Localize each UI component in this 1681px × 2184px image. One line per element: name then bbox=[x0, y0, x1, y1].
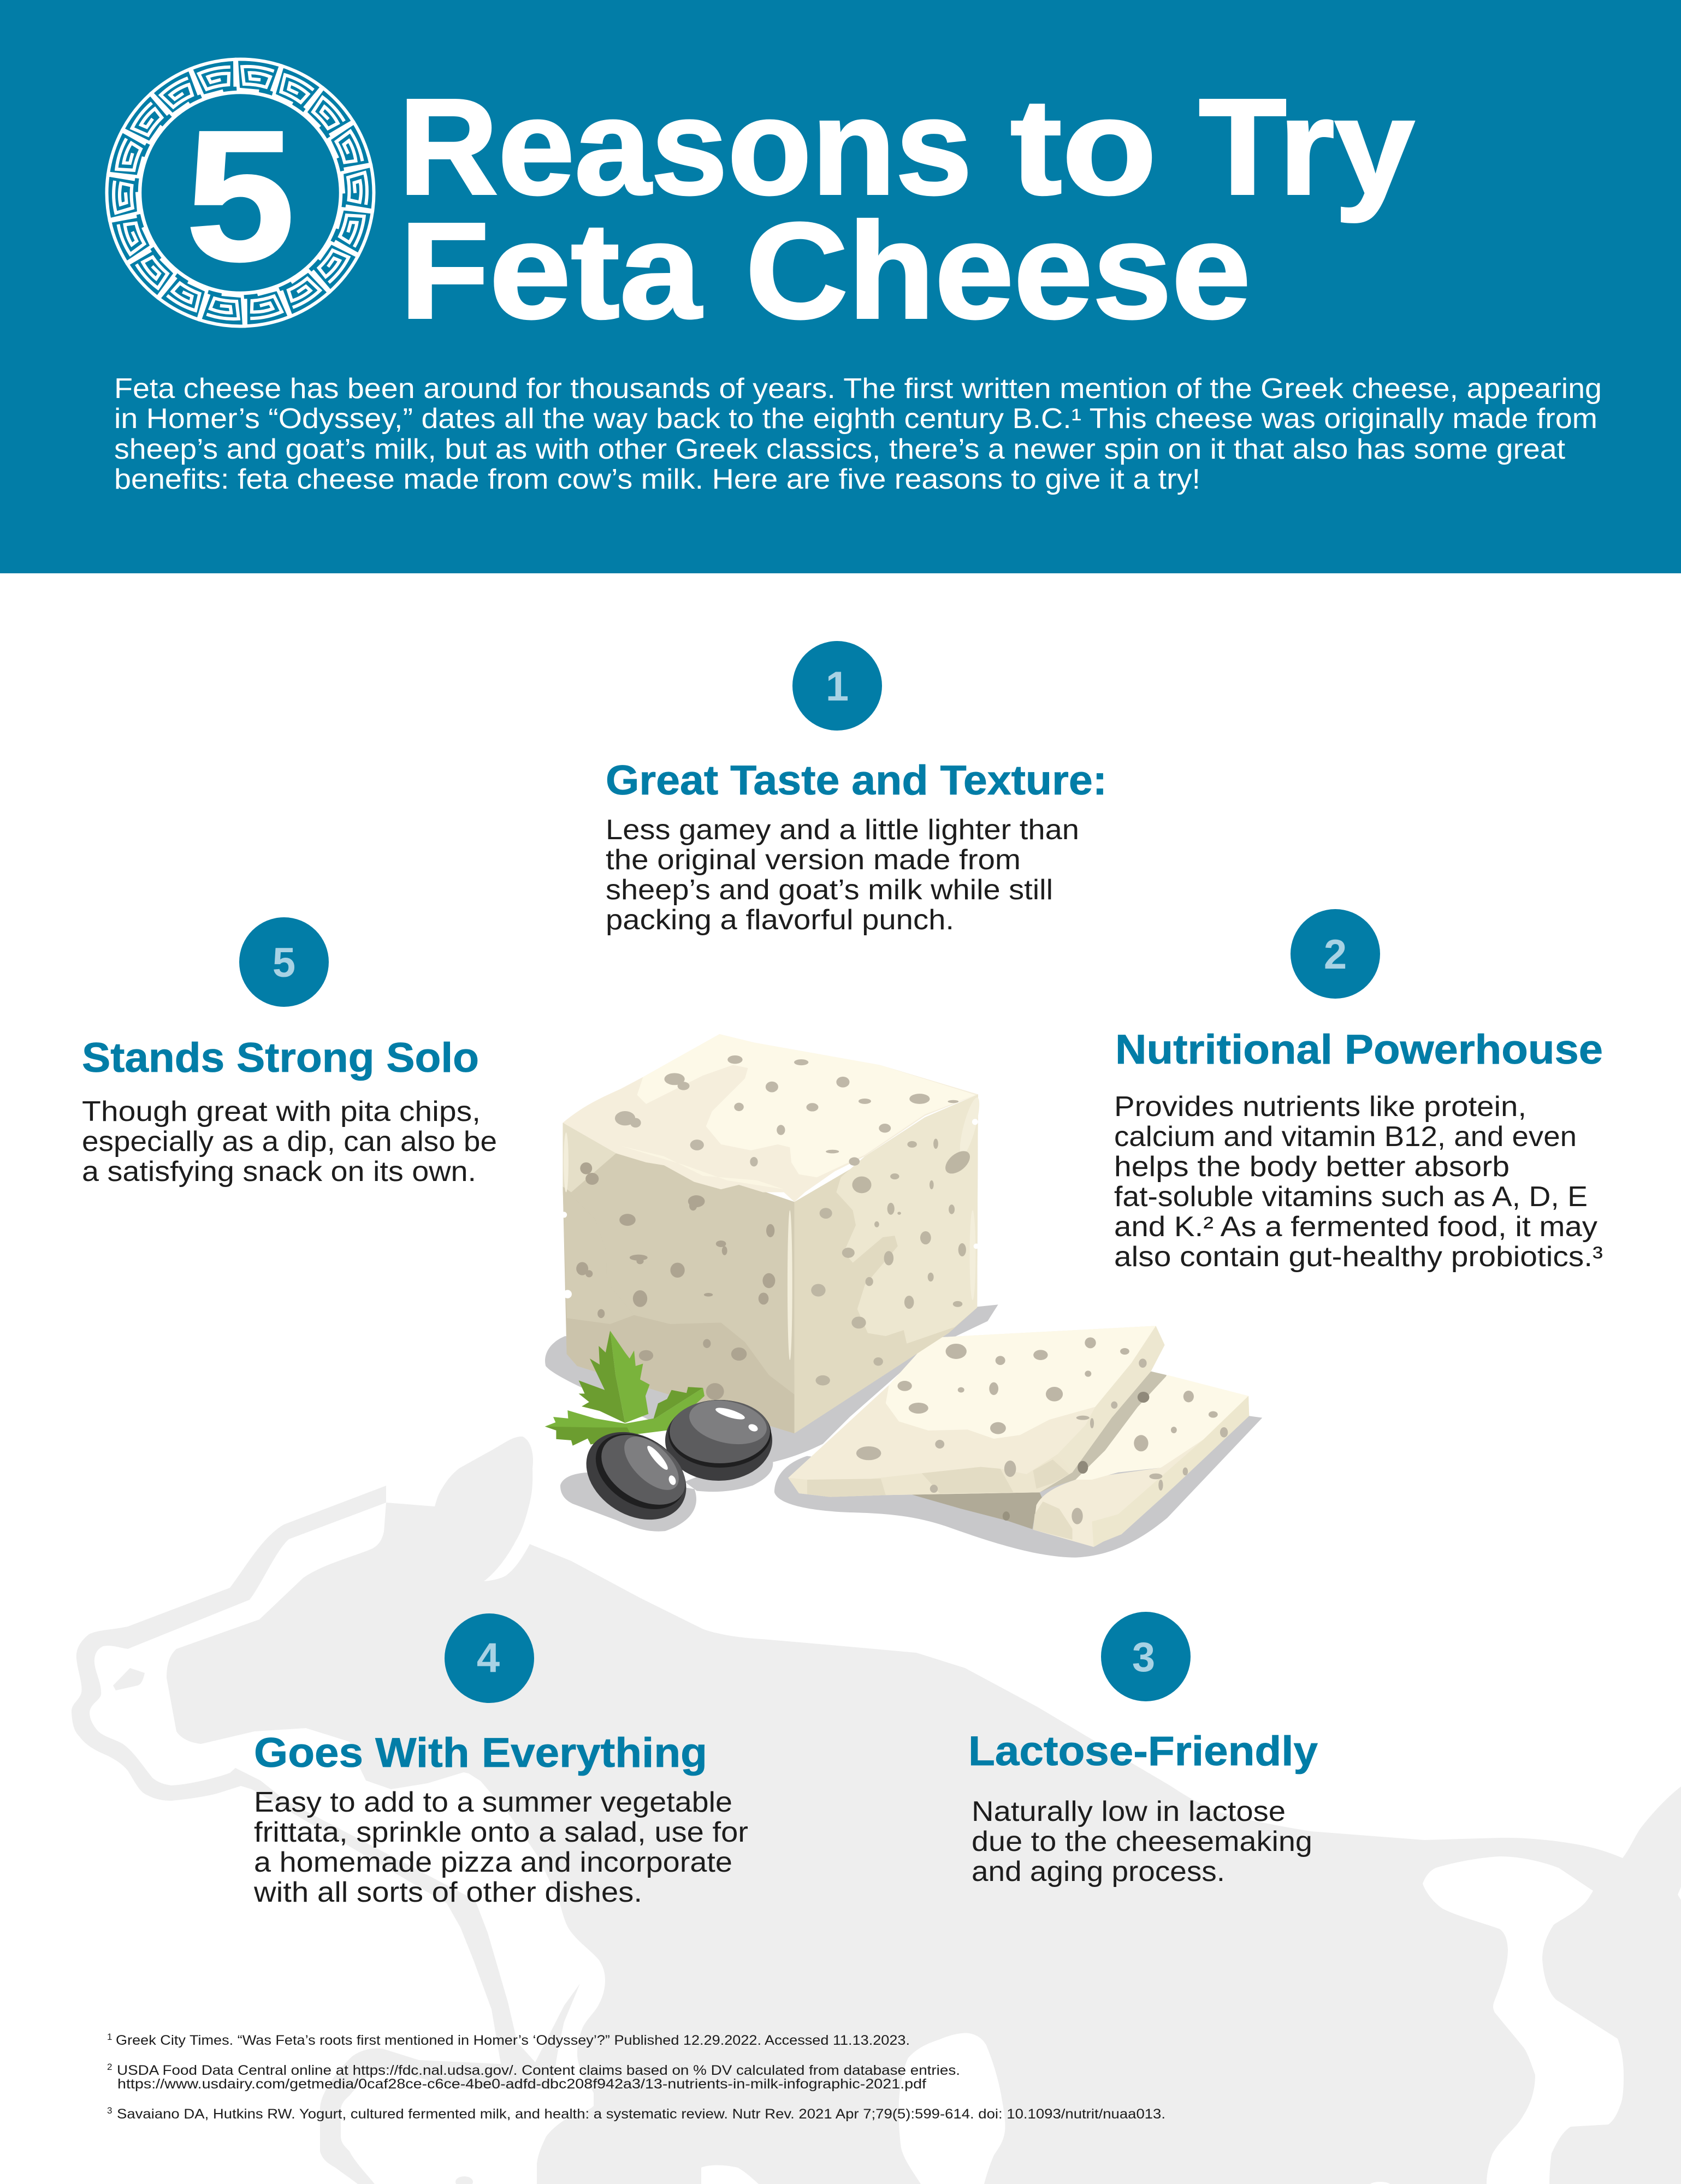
body 4: frittata, sprinkle onto a salad, use for bbox=[254, 1817, 748, 1848]
body 1 bbox=[606, 814, 1079, 936]
icon: greek key ring badge with number 5 bbox=[106, 57, 375, 328]
intro paragraph: sheep’s and goat’s milk, but as with other Greek classics, there’s a newer spin on it that also has some great bbox=[114, 434, 1566, 465]
heading 4: Goes With Everything bbox=[254, 1730, 707, 1776]
footnotes: 2 bbox=[107, 2062, 112, 2072]
body 2: also contain gut-healthy probiotics.³ bbox=[1114, 1241, 1603, 1273]
illustration: feta cheese block, slices, olives and parsley bbox=[545, 1034, 1262, 1558]
number badge 3 bbox=[1101, 1612, 1191, 1701]
intro paragraph: Feta cheese has been around for thousands of years. The first written mention of the Greek cheese, appearing bbox=[114, 373, 1602, 405]
cheese block bbox=[561, 1034, 983, 1433]
heading 3: Lactose-Friendly bbox=[968, 1728, 1318, 1775]
heading 1: Great Taste and Texture: bbox=[606, 757, 1107, 804]
body 3: and aging process. bbox=[972, 1856, 1225, 1888]
body 3 bbox=[972, 1796, 1312, 1888]
body 5: a satisfying snack on its own. bbox=[82, 1156, 476, 1188]
number badge 4 bbox=[445, 1613, 534, 1703]
footnotes: Savaiano DA, Hutkins RW. Yogurt, cultured fermented milk, and health: a systematic review. Nutr Rev. 2021 Apr 7;79(5):599-614. doi: 10.1093/nutrit/nuaa013. bbox=[117, 2106, 1165, 2122]
background: cow silhouette bbox=[72, 1437, 1681, 2184]
body 3: due to the cheesemaking bbox=[972, 1826, 1312, 1857]
title: Try bbox=[1199, 70, 1414, 223]
body 4 bbox=[253, 1787, 748, 1908]
icon: greek key ring badge with number 5: 5 bbox=[186, 92, 295, 300]
footnotes: 1 bbox=[107, 2032, 112, 2042]
panel: reason 3 lactose friendly bbox=[968, 1612, 1318, 1888]
title bbox=[399, 70, 1414, 347]
intro paragraph: benefits: feta cheese made from cow’s milk. Here are five reasons to give it a try! bbox=[114, 464, 1200, 495]
body 2: Provides nutrients like protein, bbox=[1114, 1091, 1526, 1123]
footnotes: Greek City Times. “Was Feta’s roots first mentioned in Homer’s ‘Odyssey’?” Published 12.29.2022. Accessed 11.13.2023. bbox=[116, 2033, 910, 2048]
panel: reason 1 great taste and texture bbox=[606, 641, 1107, 936]
body 1: Less gamey and a little lighter than bbox=[606, 814, 1079, 846]
panel: reason 2 nutritional powerhouse bbox=[1114, 909, 1603, 1273]
body 5: especially as a dip, can also be bbox=[82, 1126, 497, 1158]
header band bbox=[0, 0, 1681, 573]
body 1: packing a flavorful punch. bbox=[606, 904, 954, 936]
footnotes: USDA Food Data Central online at https://fdc.nal.udsa.gov/. Content claims based on % DV calculated from database entries. bbox=[117, 2063, 960, 2078]
shadow: under cheese block and olives bbox=[545, 1304, 998, 1532]
body 3: Naturally low in lactose bbox=[972, 1796, 1286, 1827]
body 2: and K.² As a fermented food, it may bbox=[1114, 1211, 1597, 1243]
intro paragraph bbox=[114, 373, 1602, 495]
body 1: the original version made from bbox=[606, 844, 1021, 876]
number badge 2 bbox=[1291, 909, 1380, 999]
footnotes bbox=[107, 2032, 1165, 2122]
number badge 1: 1 bbox=[826, 663, 849, 710]
number badge 1 bbox=[792, 641, 882, 731]
title: to bbox=[1010, 70, 1157, 223]
body 4: with all sorts of other dishes. bbox=[253, 1877, 642, 1908]
number badge 4: 4 bbox=[477, 1635, 500, 1681]
title: Cheese bbox=[745, 194, 1251, 347]
panel: reason 5 stands strong solo bbox=[82, 917, 497, 1188]
body 5 bbox=[82, 1096, 497, 1188]
body 1: sheep’s and goat’s milk while still bbox=[606, 874, 1053, 906]
heading 2: Nutritional Powerhouse bbox=[1115, 1026, 1603, 1073]
icon: front olive bbox=[570, 1414, 702, 1538]
cheese slices bbox=[774, 1326, 1262, 1558]
footnotes: https://www.usdairy.com/getmedia/0caf28ce-c6ce-4be0-adfd-dbc208f942a3/13-nutrients-in-milk-infographic-2021.pdf bbox=[117, 2076, 926, 2092]
body 2 bbox=[1114, 1091, 1603, 1273]
footnotes: 3 bbox=[107, 2105, 112, 2116]
body 4: a homemade pizza and incorporate bbox=[254, 1847, 732, 1878]
intro paragraph: in Homer’s “Odyssey,” dates all the way back to the eighth century B.C.¹ This cheese was originally made from bbox=[114, 403, 1597, 435]
title: Feta bbox=[400, 194, 702, 347]
icon: back olive bbox=[665, 1394, 772, 1481]
title: Reasons bbox=[399, 70, 972, 223]
number badge 5 bbox=[239, 917, 329, 1007]
number badge 2: 2 bbox=[1324, 931, 1347, 978]
number badge 5: 5 bbox=[273, 940, 295, 986]
body 2: fat-soluble vitamins such as A, D, E bbox=[1114, 1181, 1588, 1213]
body 4: Easy to add to a summer vegetable bbox=[254, 1787, 732, 1818]
heading 5: Stands Strong Solo bbox=[82, 1035, 479, 1081]
parsley leaf bbox=[545, 1331, 705, 1446]
panel: reason 4 goes with everything bbox=[253, 1613, 748, 1908]
body 2: helps the body better absorb bbox=[1114, 1151, 1510, 1183]
body 2: calcium and vitamin B12, and even bbox=[1114, 1121, 1577, 1153]
number badge 3: 3 bbox=[1132, 1634, 1155, 1681]
body 5: Though great with pita chips, bbox=[82, 1096, 481, 1127]
